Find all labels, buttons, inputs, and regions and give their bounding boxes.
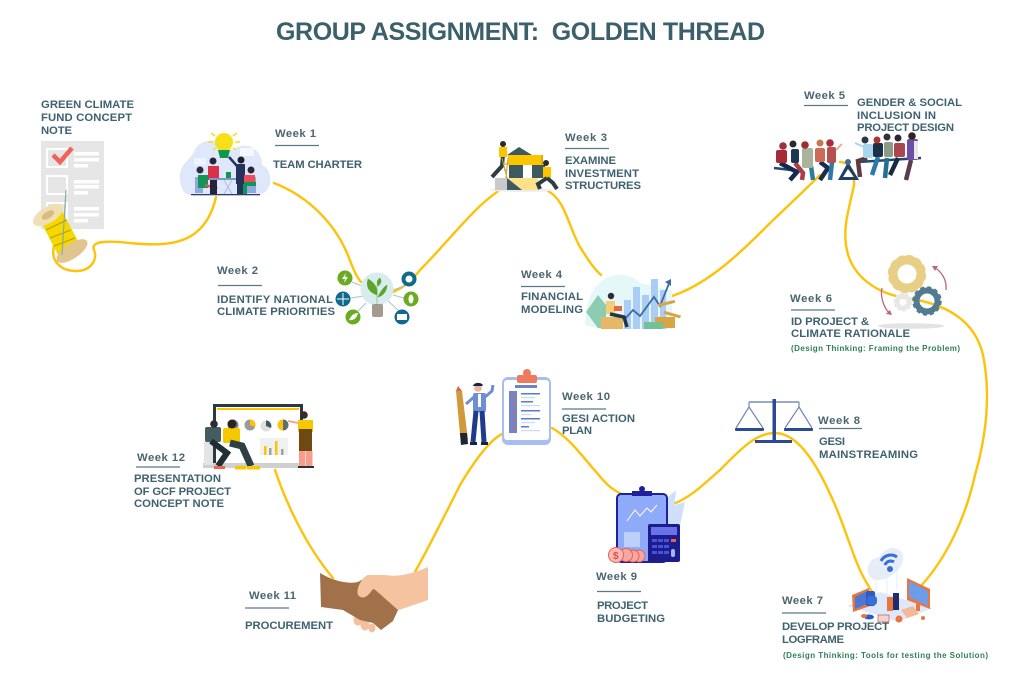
label: week 1 — [273, 128, 362, 171]
label: week 3 — [565, 132, 641, 192]
label: week 2 — [217, 265, 335, 318]
icon: investment structures building — [490, 141, 557, 192]
label: week 12: CONCEPT NOTE — [134, 498, 224, 510]
label: week 6: CLIMATE RATIONALE — [791, 328, 910, 340]
label: week 6 — [790, 293, 960, 353]
icon: presentation screen with audience — [203, 404, 314, 470]
label: week 10: GESI ACTION — [562, 413, 635, 425]
label: week 12: PRESENTATION — [134, 473, 221, 485]
label: week 2: Week 2 — [217, 265, 258, 277]
label: week 5 — [804, 90, 962, 134]
golden thread line — [53, 162, 987, 604]
label: week 1: Week 1 — [275, 128, 316, 140]
label: concept note: GREEN CLIMATE — [41, 99, 134, 111]
label: week 11: PROCUREMENT — [245, 620, 333, 632]
label: week 5: INCLUSION IN — [857, 110, 936, 122]
label: week 9 — [596, 571, 665, 625]
label: week 11: Week 11 — [249, 590, 296, 602]
icon: financial modeling chart — [585, 275, 681, 329]
label: week 10: PLAN — [562, 425, 592, 437]
label: week 2: CLIMATE PRIORITIES — [217, 306, 335, 318]
label: week 5: GENDER & SOCIAL — [857, 97, 962, 109]
label: week 4: Week 4 — [521, 269, 563, 281]
label: week 8: Week 8 — [818, 415, 860, 427]
label: week 2: IDENTIFY NATIONAL — [217, 294, 333, 306]
icon: logframe devices — [847, 548, 933, 622]
label: week 4: MODELING — [521, 304, 583, 316]
label: week 1: TEAM CHARTER — [273, 159, 362, 171]
label: week 3: Week 3 — [565, 132, 607, 144]
label: week 6: ID PROJECT & — [791, 316, 869, 328]
label: week 9: Week 9 — [596, 571, 637, 583]
label: week 12: OF GCF PROJECT — [134, 486, 231, 498]
label: week 7: LOGFRAME — [782, 634, 844, 646]
label: week 5: Week 5 — [804, 90, 845, 102]
label: concept note: NOTE — [41, 125, 72, 137]
label: week 9: BUDGETING — [597, 613, 665, 625]
label: week 7: (Design Thinking: Tools for testing the Solution) — [783, 651, 988, 660]
label: week 10: Week 10 — [562, 391, 610, 403]
label: week 12: Week 12 — [137, 452, 185, 464]
icon: concept note checklist with spool — [29, 141, 104, 267]
label: week 9: PROJECT — [597, 600, 648, 612]
label: week 6: (Design Thinking: Framing the Problem) — [791, 344, 960, 353]
label: week 8: GESI — [819, 436, 845, 448]
icon: budgeting clipboard and calculator: $ — [613, 551, 619, 562]
label: week 10 — [562, 391, 635, 437]
icon: person with pencil and checklist — [456, 369, 551, 445]
icon: gears — [878, 256, 946, 329]
icon: green bulb with climate priorities — [336, 270, 418, 324]
icon: balance scale — [735, 399, 813, 443]
label: week 7: Week 7 — [782, 595, 823, 607]
label: week 3: INVESTMENT — [565, 168, 639, 180]
label: week 3: EXAMINE — [565, 155, 616, 167]
label: week 5: PROJECT DESIGN — [857, 122, 954, 134]
label: week 4 — [521, 269, 583, 316]
label: concept note: FUND CONCEPT — [41, 112, 132, 124]
label: week 12 — [134, 452, 231, 510]
label: week 8: MAINSTREAMING — [819, 449, 918, 461]
icon: people on seesaw — [774, 132, 921, 180]
icon: handshake — [320, 567, 428, 632]
label: week 8 — [818, 415, 918, 461]
label: week 7 — [782, 595, 988, 660]
label: week 3: STRUCTURES — [565, 180, 641, 192]
icon: team meeting with lightbulb — [180, 133, 270, 195]
label: week 11 — [245, 590, 333, 632]
icon: budgeting clipboard and calculator — [608, 486, 685, 562]
title: GROUP ASSIGNMENT: GOLDEN THREAD — [276, 18, 765, 46]
label: week 6: Week 6 — [790, 293, 832, 305]
label: concept note — [41, 99, 134, 137]
label: week 4: FINANCIAL — [521, 291, 583, 303]
label: week 7: DEVELOP PROJECT — [782, 621, 889, 633]
